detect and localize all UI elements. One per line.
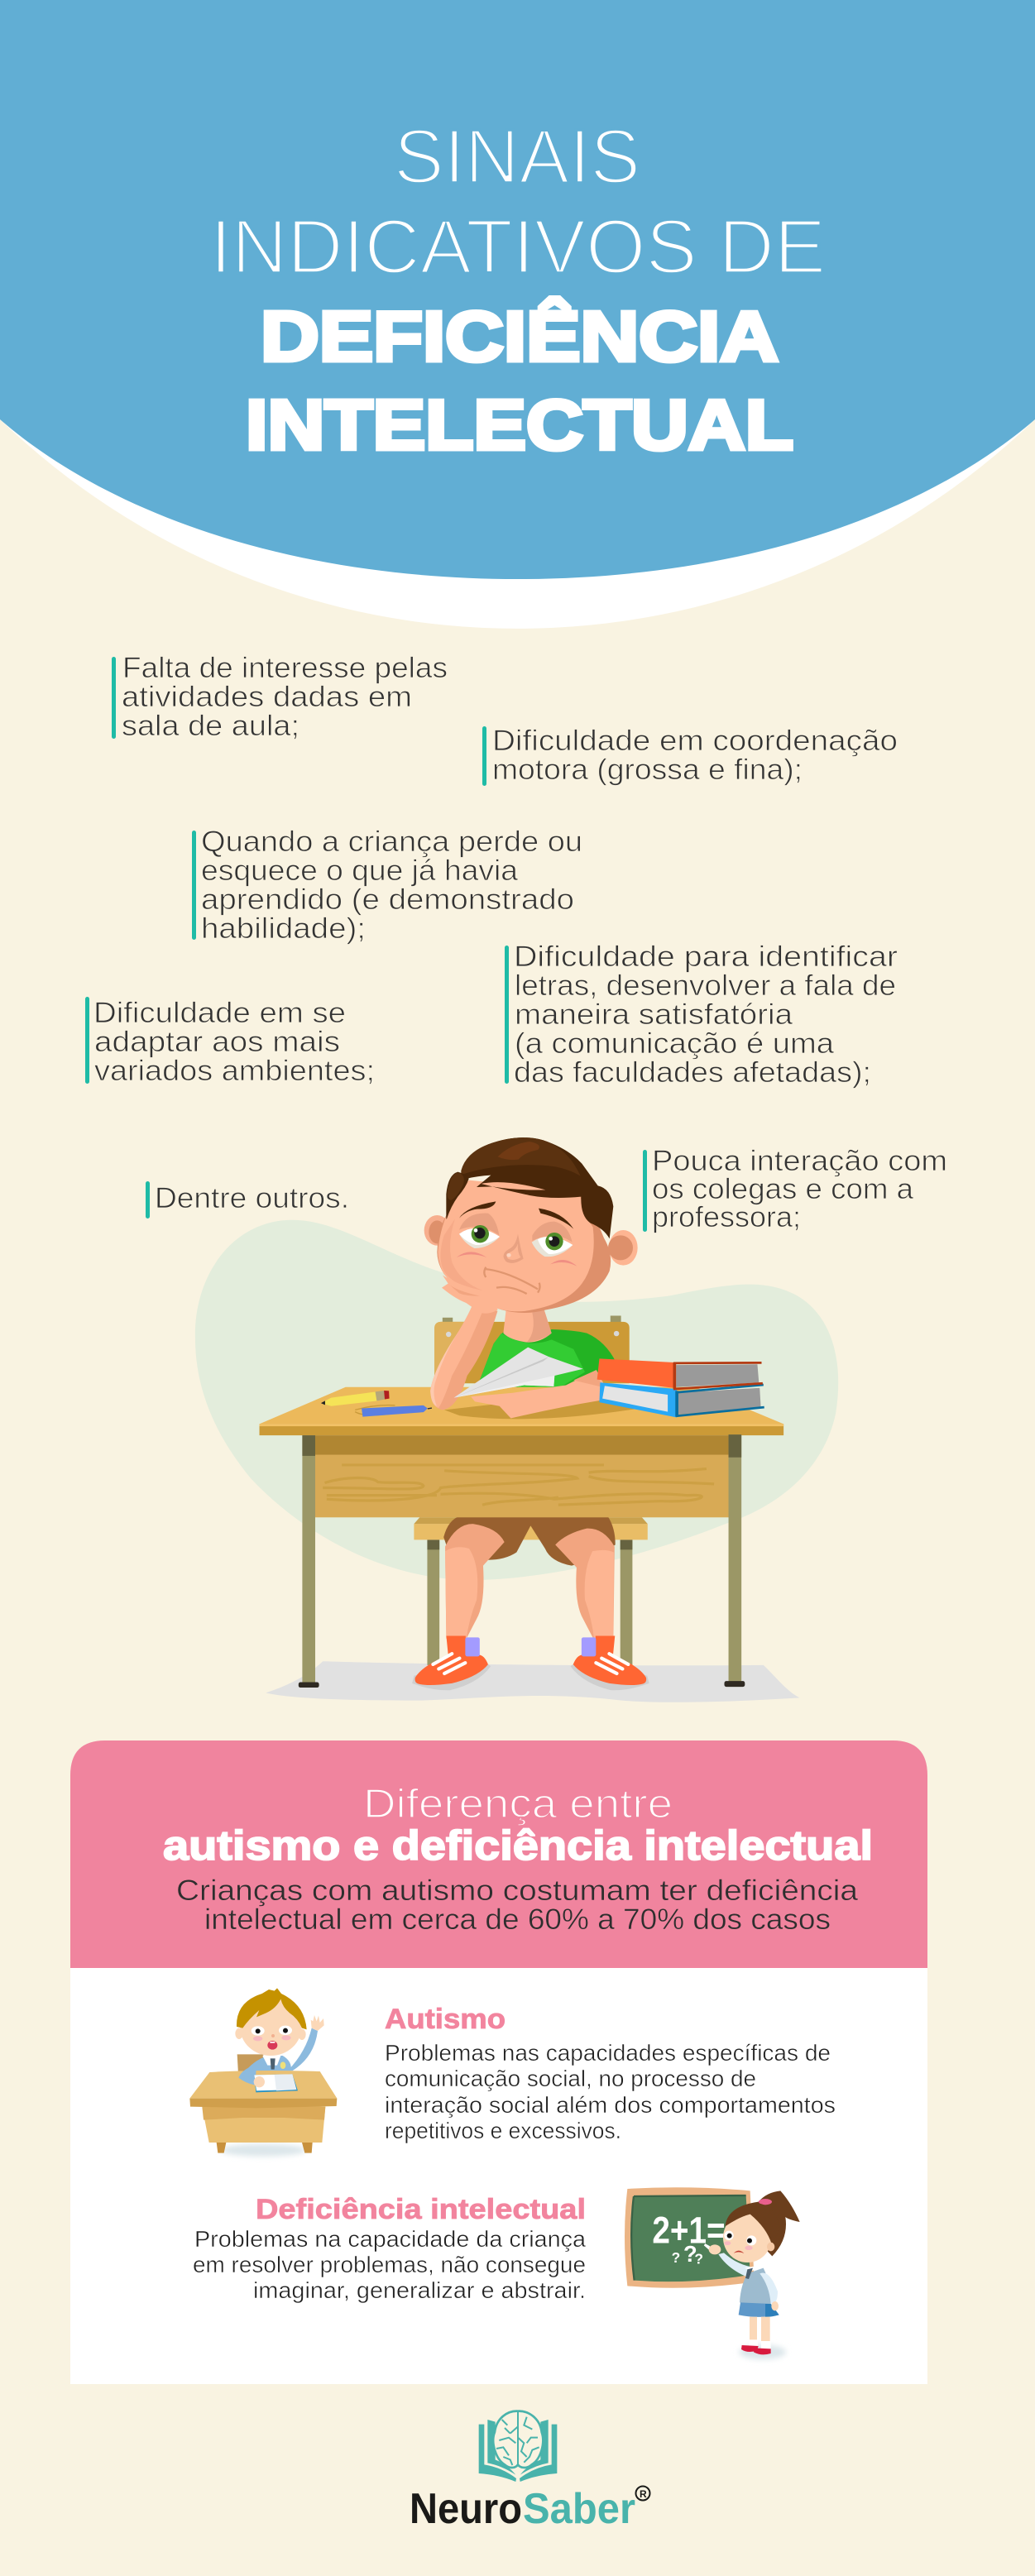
sign: perda de habilidade: esquece o que já havia — [201, 855, 519, 887]
wordmark: Neuro — [410, 2485, 522, 2533]
sign: letras e fala: letras, desenvolver a fala de — [515, 970, 896, 1002]
sign: adaptação a ambientes — [85, 997, 375, 1087]
face — [437, 1180, 611, 1313]
ears — [424, 1215, 638, 1266]
autismo text — [385, 2004, 836, 2143]
title: INDICATIVOS DE — [210, 203, 826, 290]
chair — [414, 1315, 648, 1665]
background blob — [195, 1220, 838, 1580]
panel: diferença header — [70, 1740, 927, 1968]
title: INTELECTUAL — [246, 386, 793, 465]
autismo text: Problemas nas capacidades específicas de — [385, 2040, 831, 2066]
cheeks — [457, 1252, 577, 1266]
neck — [503, 1307, 552, 1343]
sign: letras e fala: das faculdades afetadas); — [514, 1056, 871, 1089]
wordmark: R — [640, 2488, 647, 2500]
floor shadow — [266, 1661, 799, 1702]
sign: perda de habilidade — [192, 826, 582, 945]
panel subtitle — [176, 1875, 859, 1936]
chalkboard writing: ? — [694, 2251, 703, 2267]
shirt — [478, 1329, 616, 1391]
sign: falta de interesse — [112, 652, 448, 742]
boy arm supporting head — [430, 1300, 497, 1410]
mouth — [484, 1267, 540, 1294]
sign: pouca interação: os colegas e com a — [652, 1173, 914, 1205]
pencil — [321, 1391, 390, 1406]
deficiência intelectual text: imaginar, generalizar e abstrair. — [253, 2277, 586, 2303]
left eye — [459, 1225, 500, 1248]
desk — [260, 1387, 783, 1688]
panel heading: Diferença entre — [363, 1782, 673, 1827]
sign: falta de interesse: sala de aula; — [122, 710, 299, 742]
sign: adaptação a ambientes: Dificuldade em se — [93, 997, 346, 1029]
sign: coordenação motora: Dificuldade em coordenação — [492, 725, 898, 757]
sign: dentre outros: Dentre outros. — [155, 1182, 349, 1214]
nose — [504, 1234, 524, 1263]
sign: pouca interação: Pouca interação com — [652, 1145, 947, 1177]
chalkboard writing: ? — [672, 2249, 680, 2266]
hair — [446, 1137, 613, 1238]
deficiência intelectual text — [193, 2194, 586, 2303]
sign: letras e fala: (a comunicação é uma — [515, 1027, 835, 1060]
boy head — [424, 1137, 638, 1343]
right shoe — [571, 1636, 649, 1690]
sign: coordenação motora — [482, 725, 898, 786]
chalkboard writing: ? — [683, 2241, 697, 2267]
sign: perda de habilidade: Quando a criança perde ou — [201, 826, 582, 858]
eye sockets — [459, 1214, 573, 1243]
pen — [355, 1405, 432, 1417]
deficiência intelectual text: em resolver problemas, não consegue — [193, 2252, 586, 2277]
wordmark — [410, 2485, 650, 2533]
title: DEFICIÊNCIA — [261, 297, 779, 376]
logo: NeuroSaber — [410, 2411, 650, 2533]
panel heading — [163, 1782, 873, 1869]
illustration: girl at chalkboard — [625, 2187, 800, 2359]
hand — [442, 1276, 498, 1314]
title — [210, 113, 826, 465]
panel: comparison — [70, 1968, 927, 2384]
sign: perda de habilidade: habilidade); — [201, 912, 366, 945]
autismo text: Autismo — [385, 2004, 506, 2035]
sign: falta de interesse: Falta de interesse pelas — [122, 652, 448, 684]
right eye — [532, 1233, 573, 1257]
sign: pouca interação — [643, 1145, 947, 1233]
autismo text: repetitivos e excessivos. — [385, 2118, 621, 2143]
sign: adaptação a ambientes: adaptar aos mais — [94, 1026, 340, 1058]
icon: open book with brain — [479, 2411, 557, 2482]
sign: perda de habilidade: aprendido (e demonstrado — [201, 883, 574, 916]
chalkboard writing: 2+1= — [652, 2209, 726, 2251]
autismo text: interação social além dos comportamentos — [385, 2092, 836, 2118]
boy arm on desk — [471, 1370, 608, 1418]
panel heading: autismo e deficiência intelectual — [163, 1822, 873, 1869]
panel subtitle: intelectual em cerca de 60% a 70% dos casos — [204, 1903, 831, 1936]
eyebrows — [459, 1201, 573, 1229]
deficiência intelectual text: Deficiência intelectual — [256, 2194, 586, 2225]
autismo text: comunicação social, no processo de — [385, 2066, 756, 2091]
sign: coordenação motora: motora (grossa e fina); — [492, 754, 803, 786]
illustration: bored boy at school desk — [195, 1137, 838, 1702]
sign: pouca interação: professora; — [652, 1201, 801, 1233]
sign: letras e fala: Dificuldade para identificar — [514, 941, 898, 973]
boy legs and shorts — [443, 1516, 616, 1639]
sign: letras e fala: maneira satisfatória — [515, 998, 793, 1031]
sign: adaptação a ambientes: variados ambientes; — [94, 1055, 375, 1087]
illustration: boy raising hand — [189, 1988, 337, 2157]
panel subtitle: Crianças com autismo costumam ter deficiência — [176, 1875, 859, 1907]
header banner — [0, 0, 1035, 629]
desk legs — [299, 1434, 745, 1688]
left shoe — [412, 1636, 491, 1690]
paper airplane — [454, 1348, 583, 1398]
sign: letras e fala — [505, 941, 898, 1089]
chalkboard writing — [652, 2209, 726, 2267]
deficiência intelectual text: Problemas na capacidade da criança — [194, 2226, 586, 2252]
books — [597, 1358, 764, 1418]
sign: falta de interesse: atividades dadas em — [122, 681, 412, 713]
wordmark: Saber — [523, 2485, 635, 2533]
title: SINAIS — [394, 113, 640, 199]
